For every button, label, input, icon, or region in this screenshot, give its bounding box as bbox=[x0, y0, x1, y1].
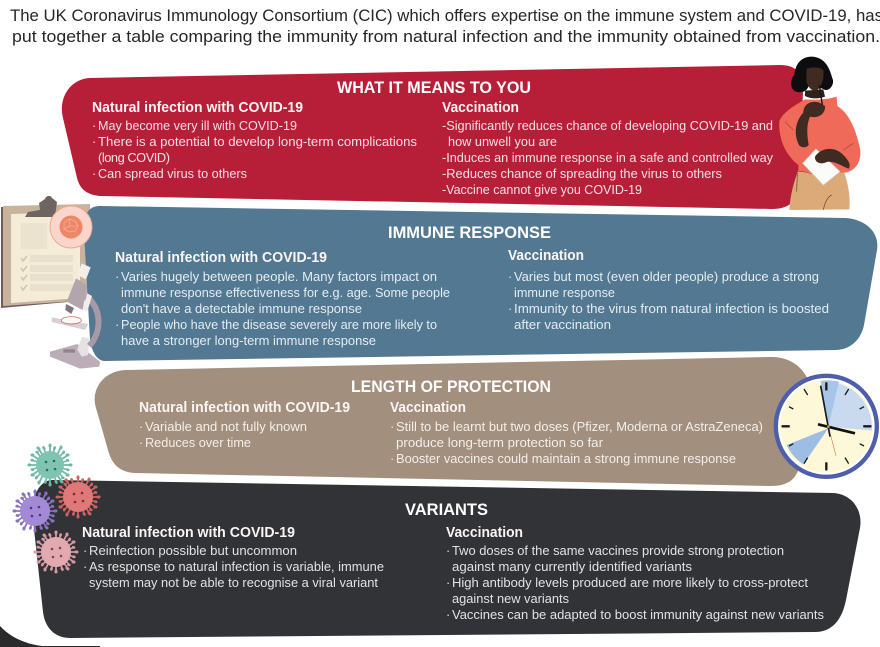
column: natural infection: · bbox=[92, 118, 96, 133]
icon: clock bbox=[774, 374, 879, 479]
icon: cell under magnification bbox=[50, 206, 92, 248]
column: vaccination: · bbox=[446, 543, 450, 558]
icon: purple virus bbox=[12, 489, 58, 533]
column: vaccination: against many currently identified variants bbox=[452, 559, 692, 574]
icon: woman thinking with notepad bbox=[779, 57, 860, 210]
column: vaccination: · bbox=[390, 451, 394, 466]
intro text bbox=[10, 6, 880, 46]
column: vaccination: · bbox=[508, 269, 512, 284]
column: natural infection: Varies hugely between people. Many factors impact on bbox=[121, 269, 437, 284]
intro text: put together a table comparing the immunity from natural infection and the immunity obtained from vaccination. bbox=[12, 27, 880, 46]
column: natural infection: · bbox=[139, 435, 143, 450]
column: natural infection: Natural infection with COVID-19 bbox=[82, 525, 295, 541]
panel: what it means to you bbox=[62, 65, 803, 209]
column: natural infection: There is a potential to develop long-term complications bbox=[98, 134, 417, 149]
column: natural infection: immune response effectiveness for e.g. age. Some people bbox=[121, 285, 450, 300]
column: vaccination: produce long-term protection so far bbox=[396, 435, 604, 450]
panel: immune response bbox=[84, 206, 877, 361]
column: vaccination: Still to be learnt but two doses (Pfizer, Moderna or AstraZeneca) bbox=[396, 419, 763, 434]
column: natural infection bbox=[92, 100, 417, 181]
column: vaccination: -Significantly reduces chance of developing COVID-19 and bbox=[442, 118, 773, 133]
heading: what it means to you: WHAT IT MEANS TO YOU bbox=[337, 78, 531, 97]
icon: teal virus bbox=[27, 443, 73, 487]
panel shape: dark bbox=[33, 480, 860, 638]
column: natural infection: · bbox=[139, 419, 143, 434]
column: vaccination: Vaccination bbox=[390, 400, 466, 416]
column: natural infection: (long COVID) bbox=[98, 150, 170, 165]
column: natural infection: system may not be able to recognise a viral variant bbox=[89, 575, 378, 590]
column: vaccination bbox=[446, 525, 824, 622]
clipboard paper bbox=[11, 212, 80, 303]
column: vaccination bbox=[442, 100, 774, 197]
column: natural infection: · bbox=[92, 166, 96, 181]
column: natural infection bbox=[115, 250, 450, 348]
icon: clipboard bbox=[1, 196, 90, 308]
column: vaccination: High antibody levels produced are more likely to cross-protect bbox=[452, 575, 808, 590]
icon: red virus bbox=[55, 475, 101, 519]
column: vaccination: against new variants bbox=[452, 591, 569, 606]
column: natural infection: Reinfection possible but uncommon bbox=[89, 543, 297, 558]
column: vaccination: Vaccines can be adapted to boost immunity against new variants bbox=[452, 607, 824, 622]
panel: length of protection bbox=[95, 357, 812, 486]
column: vaccination: · bbox=[508, 301, 512, 316]
clipboard clip bbox=[25, 196, 57, 217]
panel shape: red bbox=[62, 65, 803, 209]
column: vaccination: Immunity to the virus from natural infection is boosted bbox=[514, 301, 829, 316]
column: vaccination: Vaccination bbox=[446, 525, 523, 541]
column: vaccination: -Induces an immune response in a safe and controlled way bbox=[442, 150, 774, 165]
column: natural infection: · bbox=[115, 269, 119, 284]
column: vaccination: Varies but most (even older people) produce a strong bbox=[514, 269, 819, 284]
column: natural infection: Natural infection with COVID-19 bbox=[139, 400, 350, 416]
heading: immune response: IMMUNE RESPONSE bbox=[388, 223, 551, 242]
clipboard board bbox=[1, 205, 90, 308]
column: vaccination: immune response bbox=[514, 285, 615, 300]
column: natural infection: · bbox=[115, 317, 119, 332]
column: vaccination: -Vaccine cannot give you COVID-19 bbox=[442, 182, 642, 197]
column: natural infection: · bbox=[83, 559, 87, 574]
column: natural infection: Natural infection with COVID-19 bbox=[115, 250, 327, 266]
column: natural infection bbox=[82, 525, 384, 590]
column: natural infection: don't have a detectable immune response bbox=[121, 301, 362, 316]
panel shape: tan bbox=[95, 357, 812, 486]
heading: variants: VARIANTS bbox=[405, 500, 488, 519]
column: vaccination: how unwell you are bbox=[448, 134, 557, 149]
icon: microscope bbox=[50, 263, 100, 369]
column: natural infection: May become very ill with COVID-19 bbox=[98, 118, 297, 133]
column: natural infection: · bbox=[83, 543, 87, 558]
heading: length of protection: LENGTH OF PROTECTION bbox=[351, 377, 551, 396]
column: vaccination: · bbox=[390, 419, 394, 434]
column: natural infection: have a stronger long-term immune response bbox=[121, 333, 376, 348]
column: natural infection: Can spread virus to others bbox=[98, 166, 247, 181]
column: natural infection: Natural infection with COVID-19 bbox=[92, 100, 303, 116]
column: natural infection: Reduces over time bbox=[145, 435, 251, 450]
column: natural infection: · bbox=[92, 134, 96, 149]
panel: variants bbox=[33, 480, 860, 638]
column: vaccination bbox=[508, 248, 829, 332]
column: vaccination: after vaccination bbox=[514, 317, 611, 332]
column: natural infection: People who have the disease severely are more likely to bbox=[121, 317, 437, 332]
icon: pink virus bbox=[33, 530, 79, 574]
panel shape: blue bbox=[84, 206, 877, 361]
column: vaccination: Vaccination bbox=[442, 100, 519, 116]
column: natural infection bbox=[139, 400, 350, 450]
column: natural infection: As response to natural infection is variable, immune bbox=[89, 559, 384, 574]
column: vaccination: · bbox=[446, 607, 450, 622]
column: vaccination: Vaccination bbox=[508, 248, 584, 264]
column: vaccination: -Reduces chance of spreading the virus to others bbox=[442, 166, 722, 181]
intro text: The UK Coronavirus Immunology Consortium (CIC) which offers expertise on the immune system and COVID-19, has bbox=[10, 6, 880, 25]
corner swoosh bbox=[0, 626, 100, 647]
column: natural infection: Variable and not fully known bbox=[145, 419, 307, 434]
column: vaccination: Two doses of the same vaccines provide strong protection bbox=[452, 543, 784, 558]
column: vaccination: Booster vaccines could maintain a strong immune response bbox=[396, 451, 736, 466]
column: vaccination bbox=[390, 400, 763, 466]
column: vaccination: · bbox=[446, 575, 450, 590]
